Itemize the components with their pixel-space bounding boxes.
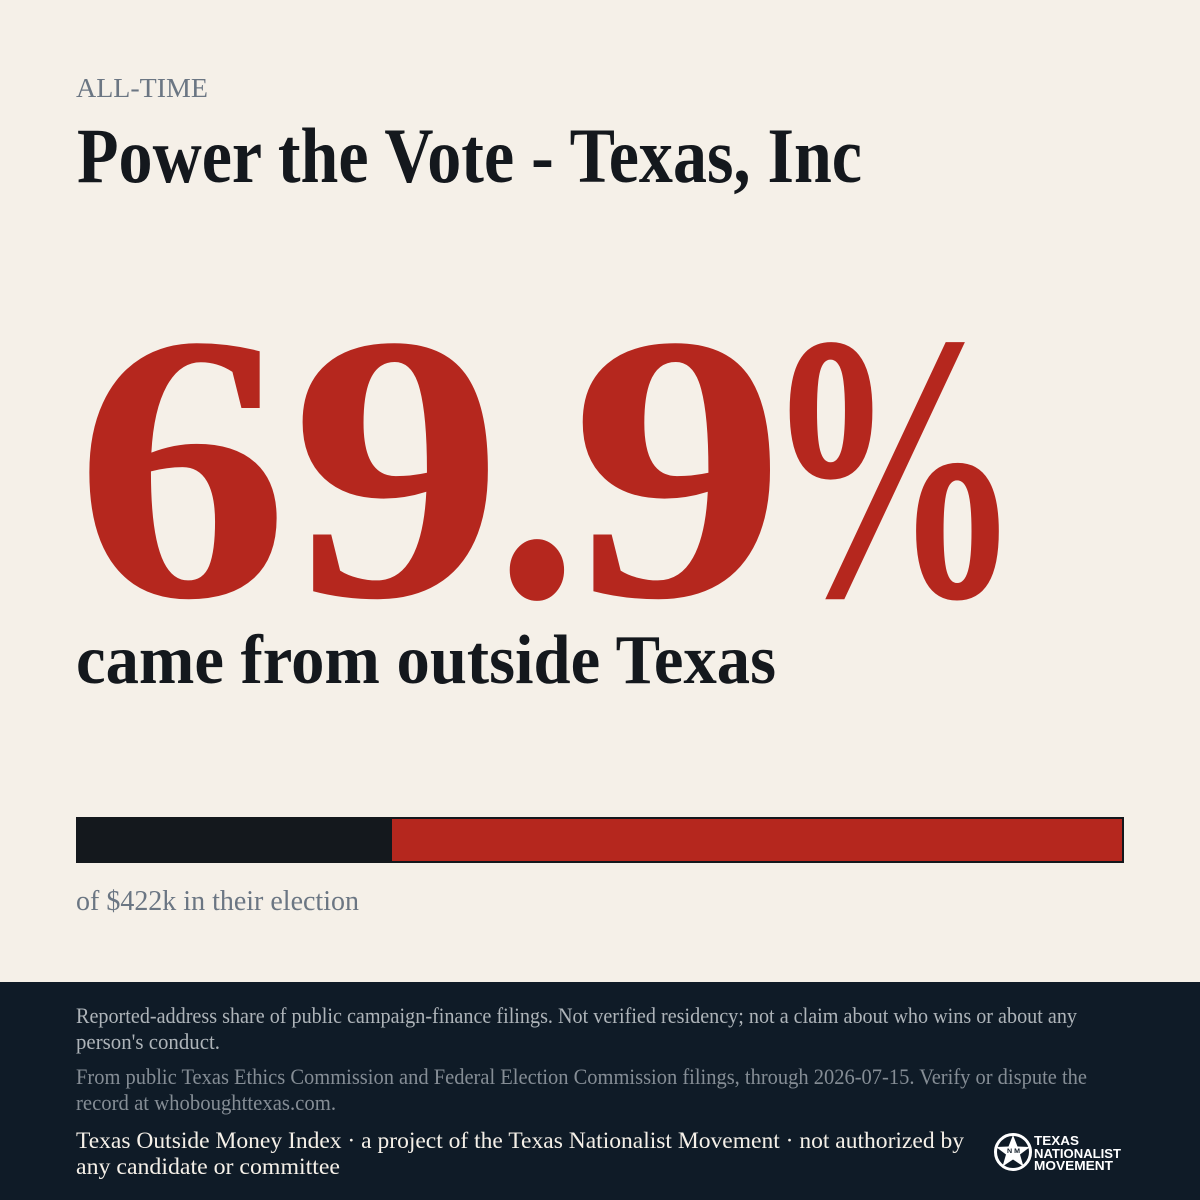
source text <box>76 1064 1087 1115</box>
footer panel <box>0 982 1200 1200</box>
source text: record at whoboughttexas.com. <box>76 1090 336 1115</box>
disclaimer text: person's conduct. <box>76 1029 220 1054</box>
disclaimer text: Reported-address share of public campaign-finance filings. Not verified residency; not a claim about who wins or about any <box>76 1003 1077 1028</box>
bar caption: of $422k in their election <box>76 885 359 917</box>
big percentage: % <box>763 256 1023 678</box>
attribution text: Texas Outside Money Index · a project of the Texas Nationalist Movement · not authorized by <box>76 1128 964 1153</box>
eyebrow label: ALL-TIME <box>76 73 208 103</box>
big percentage: 9 <box>291 257 503 679</box>
logo: Texas Nationalist Movement: MOVEMENT <box>1034 1158 1113 1173</box>
source text: From public Texas Ethics Commission and Federal Election Commission filings, through 2026-07-15. Verify or dispute the <box>76 1064 1087 1089</box>
progress bar <box>76 817 1124 863</box>
big percentage: . <box>495 256 579 678</box>
subheading: came from outside Texas <box>76 622 776 699</box>
logo: Texas Nationalist Movement: NATIONALIST <box>1034 1146 1121 1161</box>
attribution text <box>76 1128 964 1179</box>
big percentage: 6 <box>75 256 289 678</box>
logo: Texas Nationalist Movement: N M <box>1007 1149 1020 1155</box>
attribution text: any candidate or committee <box>76 1154 340 1179</box>
disclaimer text <box>76 1003 1077 1054</box>
big percentage: 9 <box>571 256 786 678</box>
logo: Texas Nationalist Movement: TEXAS <box>1034 1133 1079 1148</box>
big percentage <box>75 256 1023 679</box>
logo: Texas Nationalist Movement <box>996 1133 1121 1173</box>
title: Power the Vote - Texas, Inc <box>77 112 862 199</box>
